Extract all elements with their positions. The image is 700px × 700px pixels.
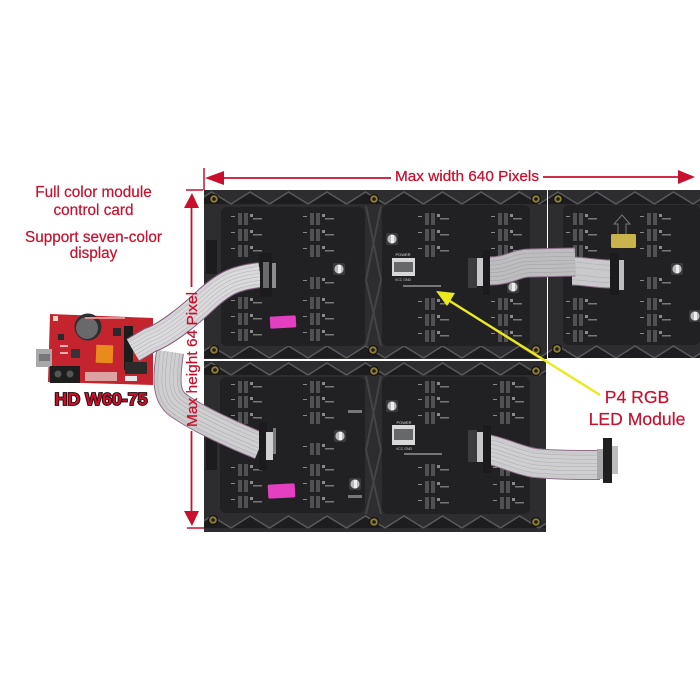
arrow: max height dimension	[184, 190, 204, 528]
ribbon cable across top modules	[489, 262, 612, 274]
panel: LED module bottom middle	[366, 361, 546, 532]
panel: LED module top right	[548, 190, 700, 358]
panel: LED module top left	[204, 190, 376, 359]
ribbon cable to bottom module	[167, 352, 260, 446]
power connector: VCC GND	[395, 278, 412, 282]
ribbon cable to top module	[133, 275, 260, 350]
power terminal	[50, 366, 80, 383]
board connector	[124, 326, 133, 370]
arrow: max width dimension	[204, 168, 695, 190]
panel: LED module top middle	[366, 190, 547, 359]
text block: control card description: Support seven-color	[25, 229, 162, 246]
connectors on top cable	[468, 250, 624, 295]
power connector: POWER	[395, 252, 411, 257]
card name label: HD W60-75	[54, 389, 148, 409]
direction arrow outline	[614, 215, 630, 236]
text block: control card description: control card	[54, 202, 133, 219]
text block: control card description: Full color module	[35, 184, 152, 201]
callout: P4 RGB LED Module	[589, 387, 685, 429]
power connector	[392, 252, 415, 282]
ribbon cable from bottom module to the right	[487, 449, 600, 465]
connectors on bottom cable	[468, 425, 618, 483]
label sticker: yellow	[611, 234, 636, 248]
power connector: POWER	[396, 420, 412, 425]
panel: LED module bottom left	[204, 361, 376, 532]
callout: P4 RGB LED Module: LED Module	[589, 409, 685, 429]
text block: control card description	[25, 184, 162, 262]
logo chip	[96, 345, 113, 363]
arrow: yellow pointer to module	[436, 291, 600, 395]
callout: P4 RGB LED Module: P4 RGB	[605, 387, 669, 407]
label sticker: pink	[268, 483, 295, 499]
connector bottom left	[259, 422, 276, 470]
usb port	[36, 349, 52, 367]
power connector: VCC GND	[396, 447, 413, 451]
power connector	[392, 420, 415, 451]
label sticker: pink	[270, 315, 296, 329]
heading: max height: Max height 64 Pixel	[184, 292, 201, 427]
coin battery	[74, 314, 102, 340]
heading: max width: Max width 640 Pixels	[395, 168, 539, 185]
text block: control card description: display	[70, 245, 118, 262]
panel: control card HD W60-75	[36, 314, 153, 385]
connector top left	[260, 253, 276, 297]
